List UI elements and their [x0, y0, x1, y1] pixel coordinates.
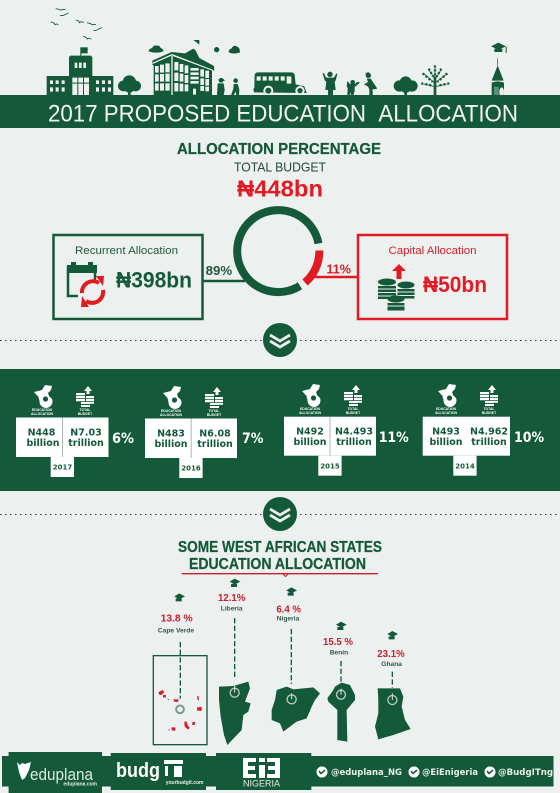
- icons: education allocation and total budget 2017: [31, 385, 94, 416]
- map: Nigeria: 6.4 %: [276, 604, 301, 615]
- icon: coins and arrow: [205, 387, 223, 408]
- connector with 11% label: 11%: [326, 262, 351, 276]
- logo: budgit: [111, 753, 206, 790]
- allocation section heading: TOTAL BUDGET: [234, 161, 326, 175]
- card: 2015: N4.493: [335, 426, 373, 438]
- card: 2017: trillion: [68, 438, 104, 449]
- header illustration: left side: [47, 40, 240, 96]
- church steeple and graduation cap: [491, 43, 507, 97]
- clouds and leaf: [149, 40, 240, 53]
- map: Nigeria: Nigeria: [277, 616, 300, 623]
- map: Ghana: Ghana: [381, 661, 402, 668]
- caption text: BUDGET: [207, 413, 222, 417]
- left school building: [47, 47, 113, 95]
- header illustration: right side: [253, 43, 507, 97]
- connector with 89% label: 89%: [206, 263, 233, 278]
- logo: eduplana: eduplana.com: [63, 782, 98, 788]
- icon: coins with up arrow: [378, 264, 414, 310]
- people: [323, 72, 377, 97]
- card: 2017: 2017: [53, 464, 72, 472]
- card: 2015: billion: [293, 437, 327, 448]
- card: 2017: 6%: [112, 431, 134, 447]
- main school: [152, 49, 214, 95]
- map: Liberia: 12.1%: [218, 593, 246, 604]
- caption text: [435, 407, 497, 415]
- icon: chevron down button 2: [263, 497, 297, 531]
- school bus: [253, 72, 307, 97]
- card: 2017: N7.03: [70, 428, 102, 438]
- caption text: [160, 409, 222, 417]
- map: Cape Verde: [153, 593, 207, 745]
- icon: map with naira bag: [302, 384, 320, 407]
- connector with 89% label: [203, 263, 245, 281]
- title banner: 2017 PROPOSED EDUCATION ALLOCATION: [48, 100, 518, 128]
- tree round: [394, 76, 418, 95]
- icon: calendar with refresh arrows: [67, 262, 104, 307]
- card: 2014: trillion: [471, 437, 507, 448]
- card: 2015: 11%: [379, 430, 409, 446]
- logo: eduplana: eduplana: [30, 765, 93, 784]
- card: 2015: N492: [296, 426, 324, 438]
- social handles: @EiEnigeria: [422, 768, 478, 778]
- panel: recurrent allocation: [54, 235, 202, 319]
- tree leafy: [421, 65, 449, 95]
- map: Nigeria: [272, 587, 320, 732]
- donut chart: [237, 210, 319, 292]
- birds: [51, 9, 102, 39]
- map: Liberia: Liberia: [221, 605, 243, 612]
- panel: capital allocation: [358, 235, 507, 319]
- card: 2016: N483: [157, 428, 185, 440]
- map: Liberia: [218, 579, 251, 745]
- west african maps: [153, 579, 411, 745]
- connector with 11% label: [312, 262, 358, 277]
- icons: education allocation and total budget 2014: [435, 384, 498, 415]
- social handles: [316, 766, 553, 778]
- caption text: ALLOCATION: [299, 411, 322, 415]
- caption text: EDUCATION: [161, 409, 182, 413]
- caption text: ALLOCATION: [31, 412, 54, 416]
- icon: map with naira bag: [34, 385, 52, 408]
- caption text: [31, 408, 93, 416]
- card: 2014: billion: [429, 437, 463, 448]
- caption text: ALLOCATION: [435, 411, 458, 415]
- card: 2014: N4.962: [470, 426, 508, 438]
- caption text: BUDGET: [78, 412, 93, 416]
- icon: coins and arrow: [480, 385, 498, 406]
- map: Benin: 15.5 %: [323, 637, 353, 648]
- allocation section heading: ALLOCATION PERCENTAGE: [177, 141, 381, 158]
- panel: yearly allocations band: [0, 369, 560, 491]
- caption text: EDUCATION: [300, 407, 321, 411]
- card: 2017: billion: [26, 438, 60, 449]
- caption text: EDUCATION: [32, 408, 53, 412]
- card: 2016: [145, 418, 264, 478]
- social handles: @eduplana_NG: [331, 768, 402, 778]
- panel: recurrent allocation: ₦398bn: [116, 268, 192, 292]
- caption text: TOTAL: [80, 408, 90, 412]
- card: 2016: N6.08: [199, 428, 231, 440]
- icon: chevron down button: [263, 323, 297, 357]
- logo: EiE Nigeria: [216, 753, 311, 790]
- panel: capital allocation: Capital Allocation: [388, 245, 476, 257]
- allocation section heading: [177, 141, 381, 202]
- card: 2016: trillion: [197, 439, 233, 450]
- card: 2015: [284, 417, 409, 476]
- card: 2016: 2016: [181, 464, 201, 472]
- card: 2016: billion: [154, 439, 188, 450]
- card: 2014: [423, 417, 544, 476]
- social handles: @BudgITng: [498, 768, 553, 778]
- panel: capital allocation: ₦50bn: [423, 272, 487, 297]
- panel: recurrent allocation: Recurrent Allocation: [75, 245, 178, 257]
- caption text: ALLOCATION: [160, 413, 183, 417]
- card: 2014: N493: [432, 426, 460, 438]
- icons: education allocation and total budget 2015: [299, 384, 362, 415]
- allocation section heading: ₦448bn: [237, 176, 323, 202]
- card: 2014: 2014: [455, 462, 475, 470]
- map: Benin: Benin: [330, 649, 348, 656]
- west african states heading: EDUCATION ALLOCATION: [189, 556, 366, 573]
- card: 2017: N448: [28, 428, 56, 438]
- map: Cape Verde: Cape Verde: [158, 628, 194, 635]
- map: Ghana: 23.1%: [377, 649, 405, 660]
- logo: budgit: yourbudgit.com: [166, 780, 204, 786]
- card: 2014: 10%: [514, 430, 544, 446]
- caption text: TOTAL: [208, 409, 220, 413]
- icon: map with naira bag: [163, 386, 181, 409]
- footer bar: [2, 752, 554, 793]
- caption text: TOTAL: [348, 407, 358, 411]
- card: 2015: 2015: [320, 462, 340, 470]
- caption text: TOTAL: [484, 407, 494, 411]
- logo: budgit: budg: [116, 760, 160, 782]
- map: Ghana: [375, 631, 411, 739]
- children walking: [217, 78, 239, 95]
- icon: coins and arrow: [76, 386, 94, 407]
- card: 2017: [16, 418, 134, 477]
- caption text: BUDGET: [482, 411, 497, 415]
- west african states heading: SOME WEST AFRICAN STATES: [178, 539, 382, 556]
- icon: coins and arrow: [344, 385, 362, 406]
- icons: education allocation and total budget 2016: [160, 386, 223, 417]
- card: 2016: 7%: [242, 431, 264, 447]
- caption text: BUDGET: [346, 411, 361, 415]
- caption text: EDUCATION: [436, 407, 457, 411]
- logo: eduplana: [9, 752, 102, 793]
- map: Benin: [323, 622, 355, 742]
- icon: map with naira bag: [438, 384, 456, 407]
- caption text: [299, 407, 361, 415]
- west african states heading: [178, 539, 382, 576]
- tree left: [118, 75, 141, 96]
- map: Cape Verde: 13.8 %: [161, 614, 193, 625]
- logo: EiE Nigeria: NIGERIA: [243, 778, 281, 790]
- card: 2015: trillion: [336, 437, 372, 448]
